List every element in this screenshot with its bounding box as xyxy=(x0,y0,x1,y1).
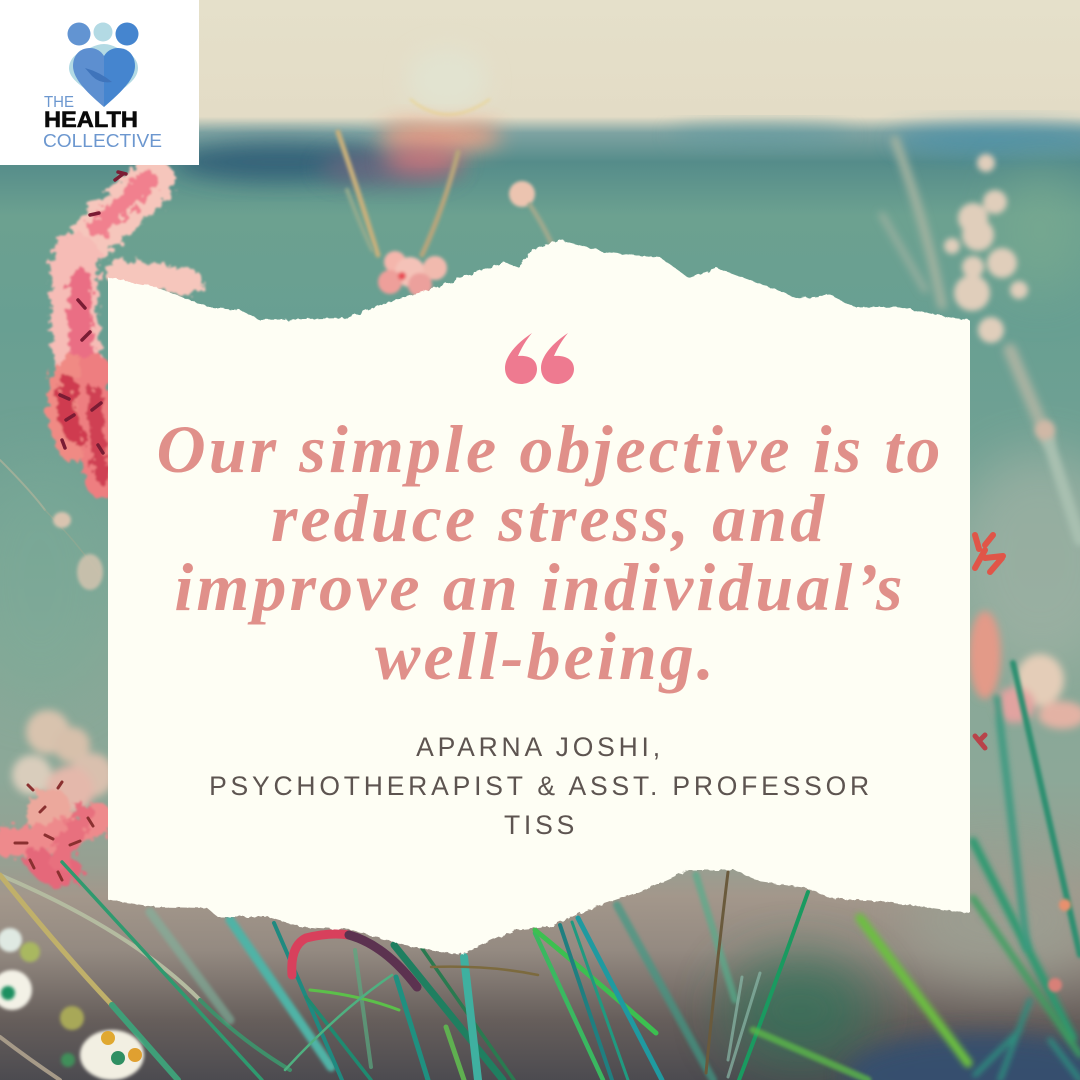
pale blurred flower: lower left xyxy=(12,710,114,814)
pink grass flower: upper left xyxy=(0,172,190,590)
seed head arching over the grass xyxy=(292,934,538,987)
attribution text xyxy=(209,732,873,840)
icon: opening quotation mark xyxy=(505,333,574,384)
quote text xyxy=(157,411,943,694)
pink grass flower: lower left xyxy=(8,782,100,880)
quote text: well-being. xyxy=(375,618,717,694)
grass blades xyxy=(0,663,1080,1080)
logo wordmark: THE xyxy=(44,94,74,111)
quote text: Our simple objective is to xyxy=(157,411,943,487)
pink grass flower: right side xyxy=(969,535,1080,748)
quote text: reduce stress, and xyxy=(271,480,827,556)
quote text: improve an individual’s xyxy=(174,549,906,625)
daisies: lower left xyxy=(0,928,144,1080)
pale grass flower: upper right xyxy=(882,140,1080,540)
logo icon: three people and heart xyxy=(68,22,138,107)
blurred flower behind the paper xyxy=(338,132,552,297)
attribution text: APARNA JOSHI, xyxy=(416,732,664,762)
logo wordmark: COLLECTIVE xyxy=(43,131,162,151)
attribution text: TISS xyxy=(504,810,578,840)
logo wordmark: HEALTH xyxy=(44,107,138,132)
attribution text: PSYCHOTHERAPIST & ASST. PROFESSOR xyxy=(209,771,873,801)
logo: The Health Collective xyxy=(0,0,199,165)
logo wordmark xyxy=(43,94,162,151)
torn paper panel xyxy=(90,240,990,955)
